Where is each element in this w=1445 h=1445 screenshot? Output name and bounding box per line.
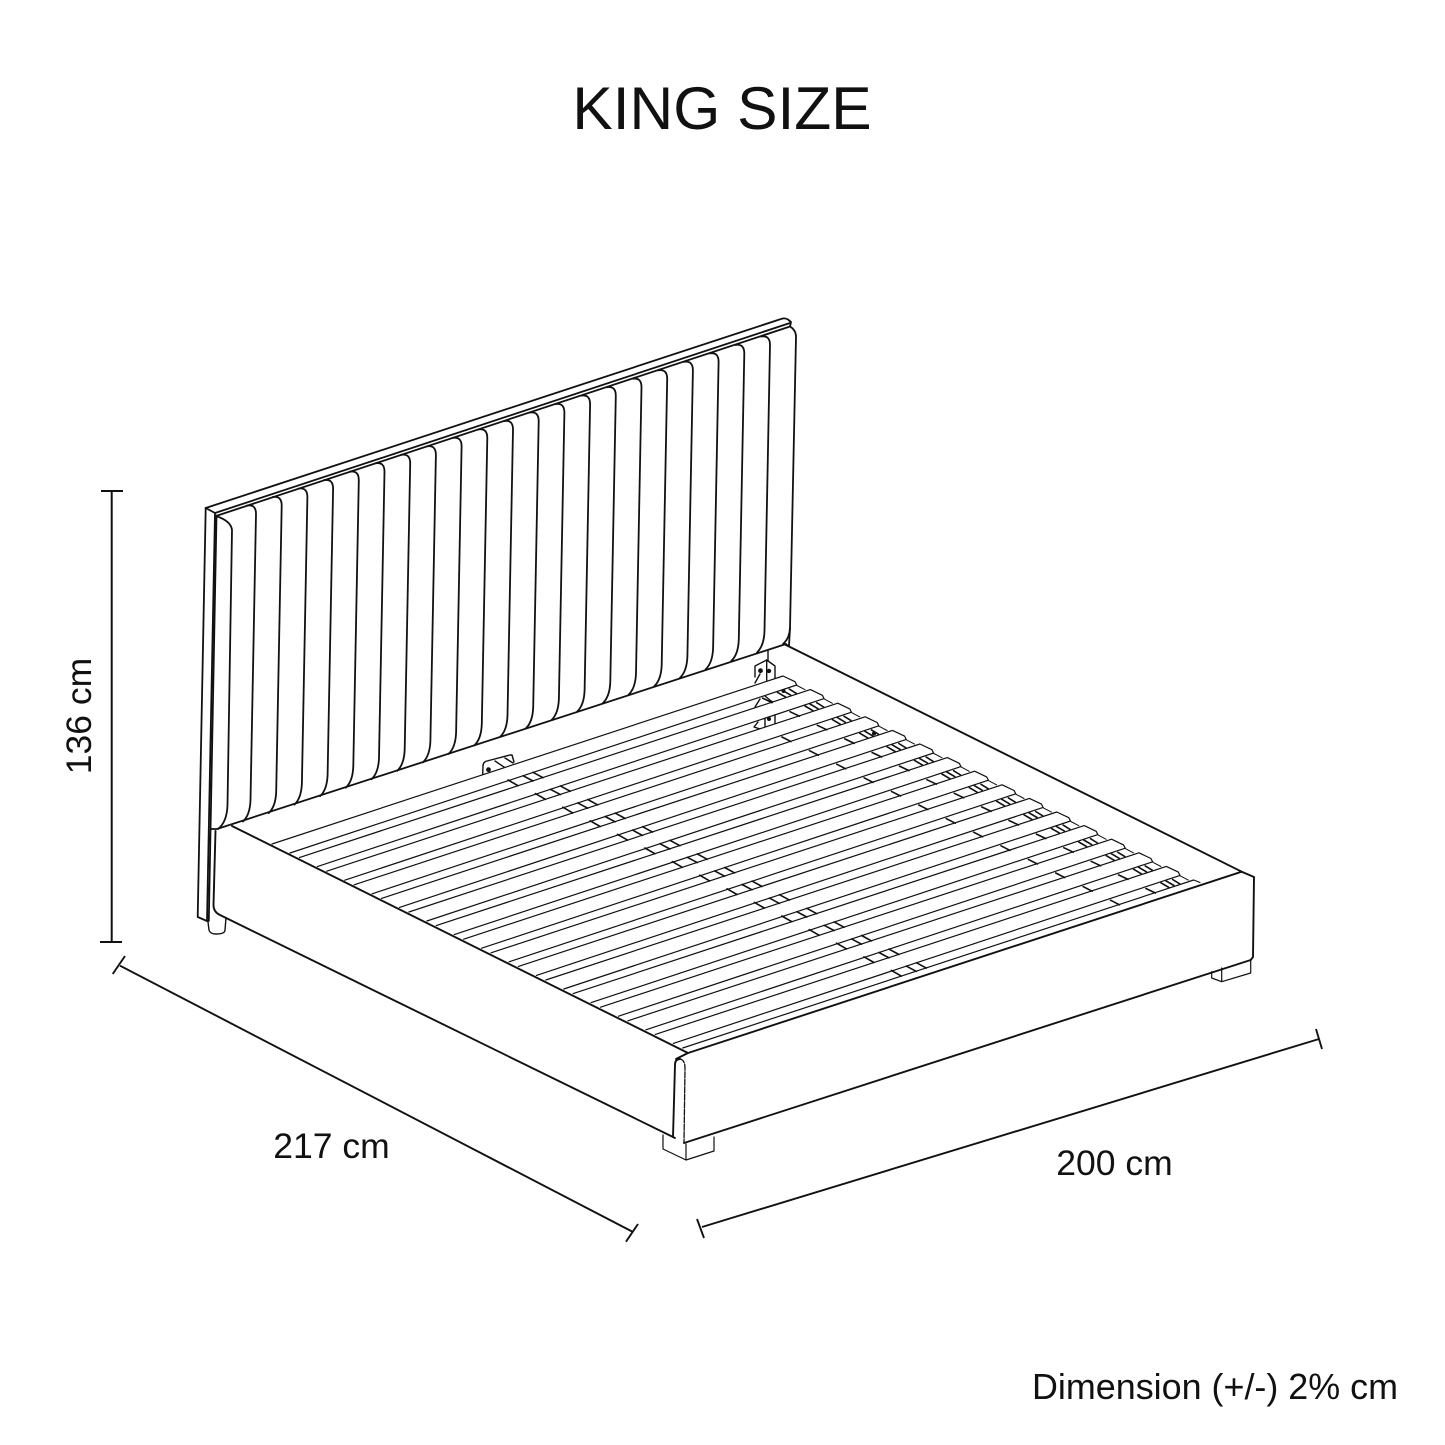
dimension: length	[113, 956, 638, 1242]
dimension: width: 200 cm	[1056, 1143, 1173, 1183]
bed frame	[214, 644, 1254, 1143]
headboard grooves	[243, 336, 770, 822]
bed slats	[272, 676, 1200, 1048]
bed illustration	[198, 318, 1254, 1160]
bed feet	[208, 918, 1251, 1160]
dimension: length: 217 cm	[273, 1126, 390, 1166]
dimension: height	[59, 491, 123, 942]
headboard	[198, 318, 796, 921]
dimension: width	[697, 1029, 1322, 1238]
hinge brackets	[483, 650, 876, 774]
tolerance note: Dimension (+/-) 2% cm	[1032, 1367, 1398, 1407]
title: KING SIZE	[572, 74, 872, 142]
dimension: height: 136 cm	[59, 658, 99, 774]
support rail ticks	[508, 686, 1188, 976]
